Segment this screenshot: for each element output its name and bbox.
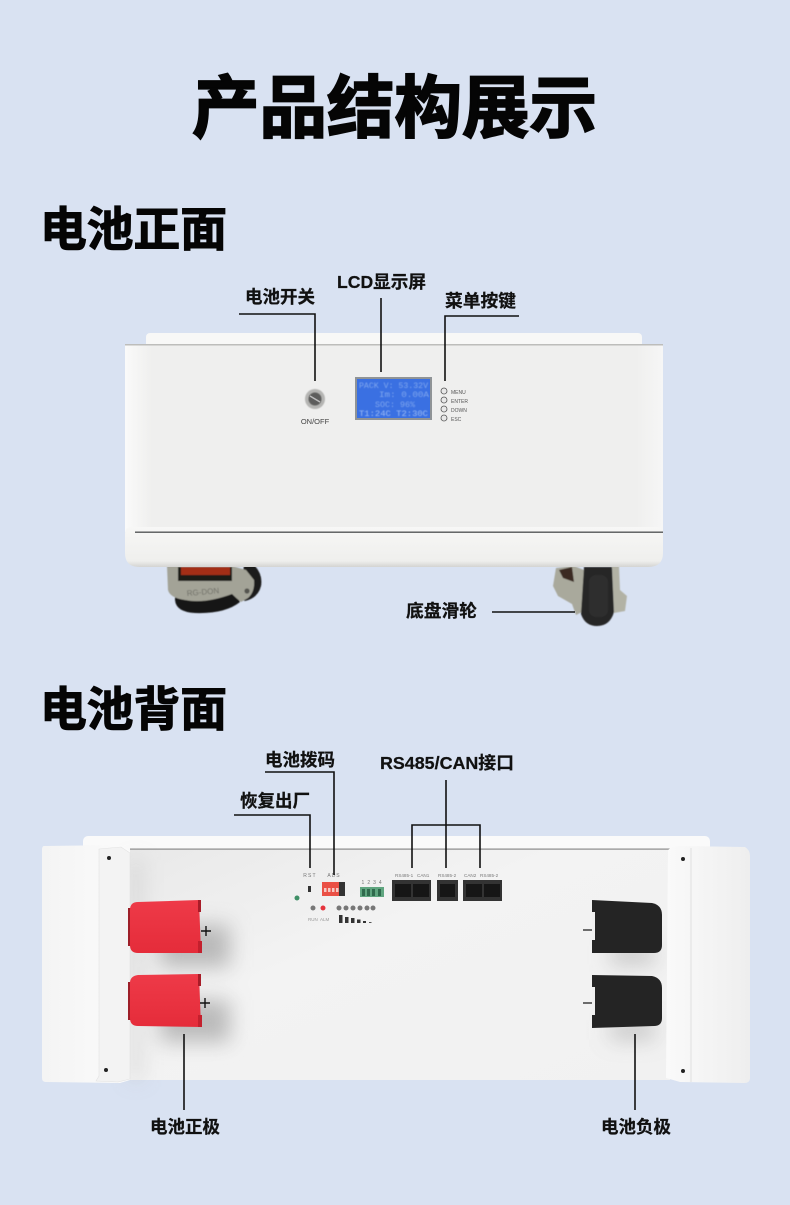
status indicators: ALM [320,917,330,922]
battery front view [125,333,663,626]
top lid [146,333,642,353]
heading: battery back: 电池背面 [40,683,227,736]
menu buttons: ESC [451,417,462,423]
right handle [666,846,750,1083]
RS485/CAN ports: CAN2 [464,873,477,878]
LCD screen [355,377,432,420]
control panel [294,873,502,923]
negative terminal lower [583,975,662,1028]
RS485/CAN ports: RS485-1 [395,873,414,878]
left caster wheel [167,566,261,613]
callout: DIP switch: 电池拨码 [265,750,335,770]
RS485/CAN ports: RS485-2 [438,873,457,878]
RS485/CAN ports: RS485-2 [480,873,499,878]
casing body [125,344,663,532]
callout: power switch: 电池开关 [245,287,315,307]
battery back view [42,836,750,1083]
callout: power switch [239,287,315,381]
LCD screen: T1:24C T2:30C [359,410,428,419]
callout: RS485/CAN: RS485/CAN接口 [380,753,514,773]
callout: menu keys: 菜单按键 [445,291,517,311]
callout: positive pole [150,1034,220,1137]
center panel [130,849,670,1080]
LCD screen: SOC: 96% [375,401,415,410]
menu buttons: MENU [451,390,466,396]
control panel: ADS [327,873,341,879]
terminal shadows [130,860,655,1080]
casing base [125,527,663,567]
callout: LCD display: LCD显示屏 [337,272,426,292]
right caster wheel [553,566,627,626]
LCD screen: PACK V: 53.32V [359,382,428,391]
callout: RS485/CAN [380,753,514,868]
DIP switch [322,882,345,896]
positive terminal upper [128,900,211,953]
menu buttons: DOWN [451,408,467,414]
power button [301,389,330,426]
LCD screen: Im: 0.00A [379,391,429,400]
left caster wheel: RG-DON [186,586,220,598]
callout: DIP switch [265,750,335,875]
green connector: 1 2 3 4 [362,880,382,886]
callout: negative pole: 电池负极 [601,1117,671,1137]
status indicators [308,906,376,923]
power button: ON/OFF [301,417,330,426]
control panel: RST [303,873,317,879]
negative terminal upper [583,900,662,953]
title: 产品结构展示 [192,71,597,147]
callout: negative pole [601,1034,671,1137]
callout: factory reset [234,791,310,868]
RS485/CAN ports: CAN1 [417,873,430,878]
green connector [360,880,384,897]
heading: battery front: 电池正面 [40,203,227,256]
callout: positive pole: 电池正极 [150,1117,220,1137]
top lid [83,836,710,856]
callout: menu keys [445,291,519,381]
status indicators: RUN [308,917,318,922]
callout: factory reset: 恢复出厂 [240,791,310,811]
menu buttons: ENTER [451,399,468,405]
callout: LCD display [337,272,426,372]
left handle [42,845,130,1083]
menu buttons [441,388,468,423]
positive terminal lower [128,974,210,1027]
callout: casters: 底盘滑轮 [406,601,478,621]
RS485/CAN ports [392,873,502,901]
